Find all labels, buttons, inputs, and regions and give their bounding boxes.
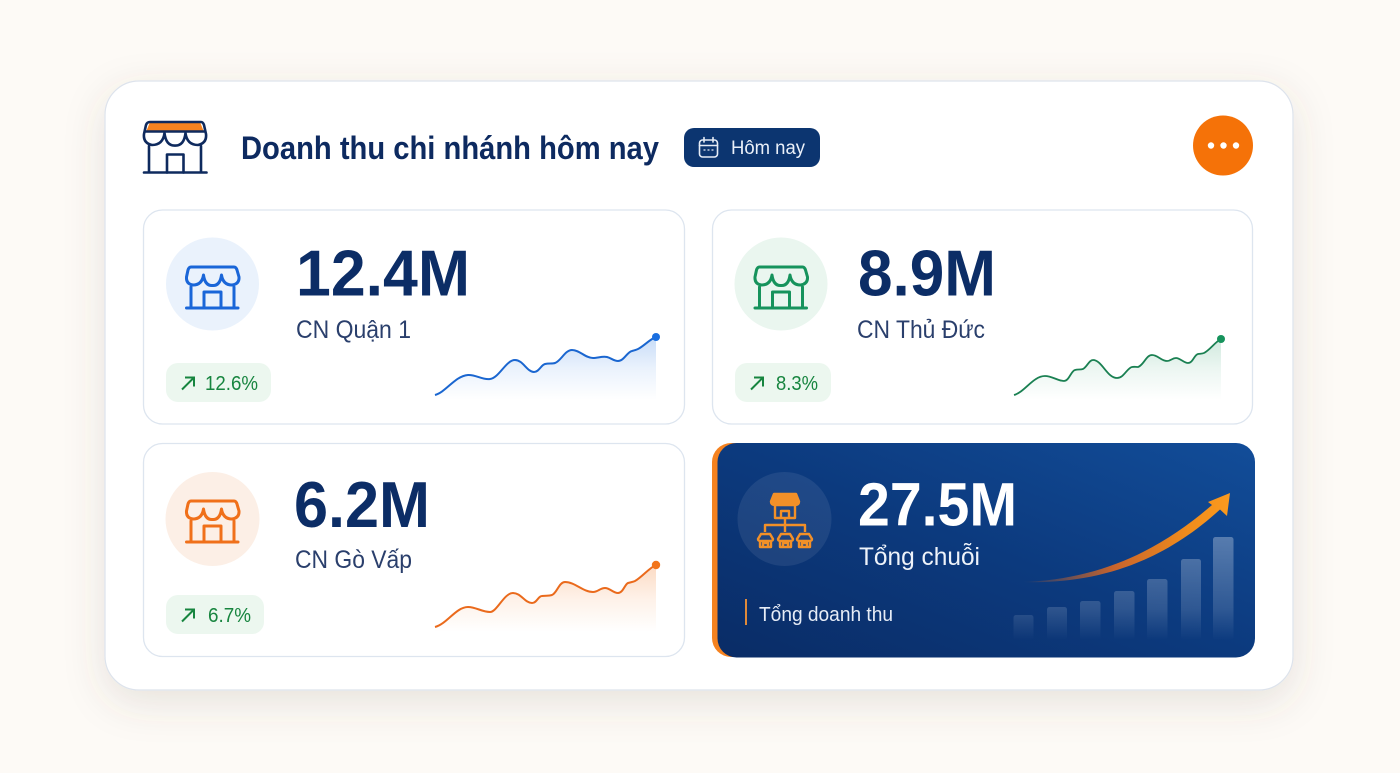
date pill xyxy=(684,128,820,167)
bar chart xyxy=(1014,537,1234,640)
icon: calendar xyxy=(700,138,718,157)
value: 12.4M xyxy=(296,236,470,310)
header xyxy=(144,116,1253,176)
menu button xyxy=(1193,116,1253,176)
icon: blue store xyxy=(166,238,259,330)
heading: Doanh thu chi nhánh hôm nay xyxy=(241,130,659,166)
growth badge xyxy=(735,363,831,402)
growth badge xyxy=(166,363,271,402)
panel: main card xyxy=(105,81,1293,690)
panel: CN Gò Vấp xyxy=(144,444,684,656)
caption: Tổng doanh thu xyxy=(759,604,893,626)
value: 6.2M xyxy=(294,468,430,541)
value: 27.5M xyxy=(858,470,1017,538)
panel: Tổng chuỗi total xyxy=(712,443,1255,658)
arrow: growth trend xyxy=(1020,493,1230,582)
sparkline xyxy=(435,333,660,400)
icon: green store xyxy=(734,238,828,330)
growth badge: 8.3% xyxy=(776,373,818,395)
icon: orange store xyxy=(166,472,260,566)
icon: chain network xyxy=(738,472,832,566)
label: Tổng chuỗi xyxy=(859,542,980,571)
panel: CN Thủ Đức xyxy=(712,210,1252,424)
sparkline xyxy=(435,561,660,632)
growth badge: 6.7% xyxy=(208,605,251,627)
branch name: CN Gò Vấp xyxy=(295,546,412,574)
date label: Hôm nay xyxy=(731,138,805,159)
sparkline xyxy=(1014,335,1225,400)
icon: header store xyxy=(144,122,206,172)
value: 8.9M xyxy=(858,236,996,310)
branch name: CN Quận 1 xyxy=(296,316,411,344)
panel: CN Quận 1 xyxy=(144,210,684,424)
branch name: CN Thủ Đức xyxy=(857,316,985,344)
growth badge xyxy=(166,595,264,634)
growth badge: 12.6% xyxy=(205,373,258,395)
